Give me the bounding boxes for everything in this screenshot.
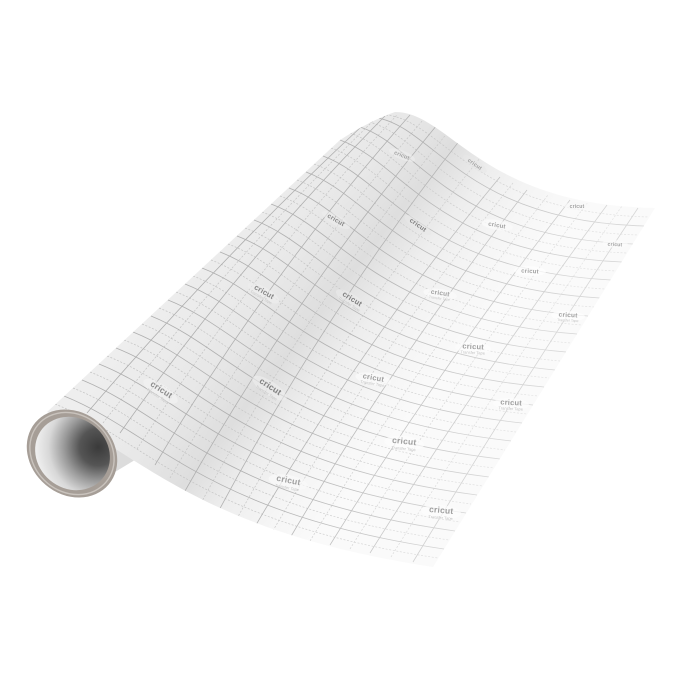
label: cricut 11: cricut <box>430 289 451 298</box>
label: cricut 2: cricut <box>258 376 284 397</box>
grid lines along the sheet <box>87 115 638 562</box>
label: cricut 4: Transfer Tape <box>391 445 417 452</box>
label: cricut 6: cricut <box>362 371 385 384</box>
underside of sheet behind roll <box>98 420 143 472</box>
grid lines across the sheet <box>64 118 644 549</box>
label: cricut 4: cricut <box>392 435 417 447</box>
panel: unrolled tape sheet <box>48 112 648 562</box>
roll outer layers <box>9 391 135 516</box>
label: cricut 14: cricut <box>488 222 506 230</box>
label: cricut 7: cricut <box>462 341 484 352</box>
label: cricut 3: Transfer Tape <box>275 483 300 492</box>
label: cricut 13 <box>515 266 546 276</box>
label: cricut 16: cricut <box>326 213 346 229</box>
label: cricut 5: Transfer Tape <box>428 514 454 521</box>
label: cricut 3 <box>276 474 308 492</box>
roll cardboard core inner <box>20 402 125 505</box>
label: cricut 7 <box>458 342 489 356</box>
label: cricut 17: cricut <box>393 150 410 162</box>
label: cricut 8 <box>495 398 529 412</box>
label: cricut 18: cricut <box>466 158 483 172</box>
label: cricut 2: Transfer Tape <box>255 384 279 402</box>
label: cricut 5: cricut <box>429 504 454 516</box>
label: cricut 15: cricut <box>408 217 428 234</box>
label: cricut 19: cricut <box>570 204 585 210</box>
label: cricut 5 <box>425 506 461 520</box>
roll light wrap ring <box>13 395 131 512</box>
label: cricut 2 <box>252 376 287 400</box>
label: cricut 1: cricut <box>149 379 175 400</box>
label: cricut 12: cricut <box>558 312 578 320</box>
product illustration: transfer tape roll <box>26 112 648 562</box>
label: cricut 19 <box>564 203 587 210</box>
label: cricut 10: Transfer Tape <box>249 289 274 306</box>
label: cricut 9: Transfer Tape <box>337 295 361 313</box>
label: cricut 11 <box>426 288 452 301</box>
label: cricut 20 <box>602 240 628 248</box>
label: cricut 10: cricut <box>253 283 276 301</box>
label: cricut 11: Transfer Tape <box>429 295 450 302</box>
label: cricut 1: Transfer Tape <box>146 387 170 405</box>
label: cricut 10 <box>250 283 280 304</box>
brand labels printed on the sheet <box>139 146 628 522</box>
label: cricut 13: cricut <box>521 269 539 275</box>
label: cricut 8: Transfer Tape <box>498 405 524 412</box>
label: cricut 12: Transfer Tape <box>557 318 579 323</box>
label: cricut 6 <box>358 373 390 387</box>
label: cricut 3: cricut <box>276 473 301 487</box>
label: cricut 8: cricut <box>500 397 522 408</box>
label: cricut 9: cricut <box>341 289 364 309</box>
label: cricut 6: Transfer Tape <box>360 379 386 388</box>
tape roll end <box>9 391 135 516</box>
label: cricut 12 <box>554 311 584 323</box>
label: cricut 20: cricut <box>607 242 623 248</box>
label: cricut 16 <box>324 212 350 228</box>
label: cricut 7: Transfer Tape <box>460 349 486 356</box>
dashed minor grid along the sheet <box>103 115 622 557</box>
dashed minor grid across the sheet <box>55 115 649 558</box>
label: cricut 4 <box>387 436 424 452</box>
label: cricut 14 <box>481 220 506 230</box>
